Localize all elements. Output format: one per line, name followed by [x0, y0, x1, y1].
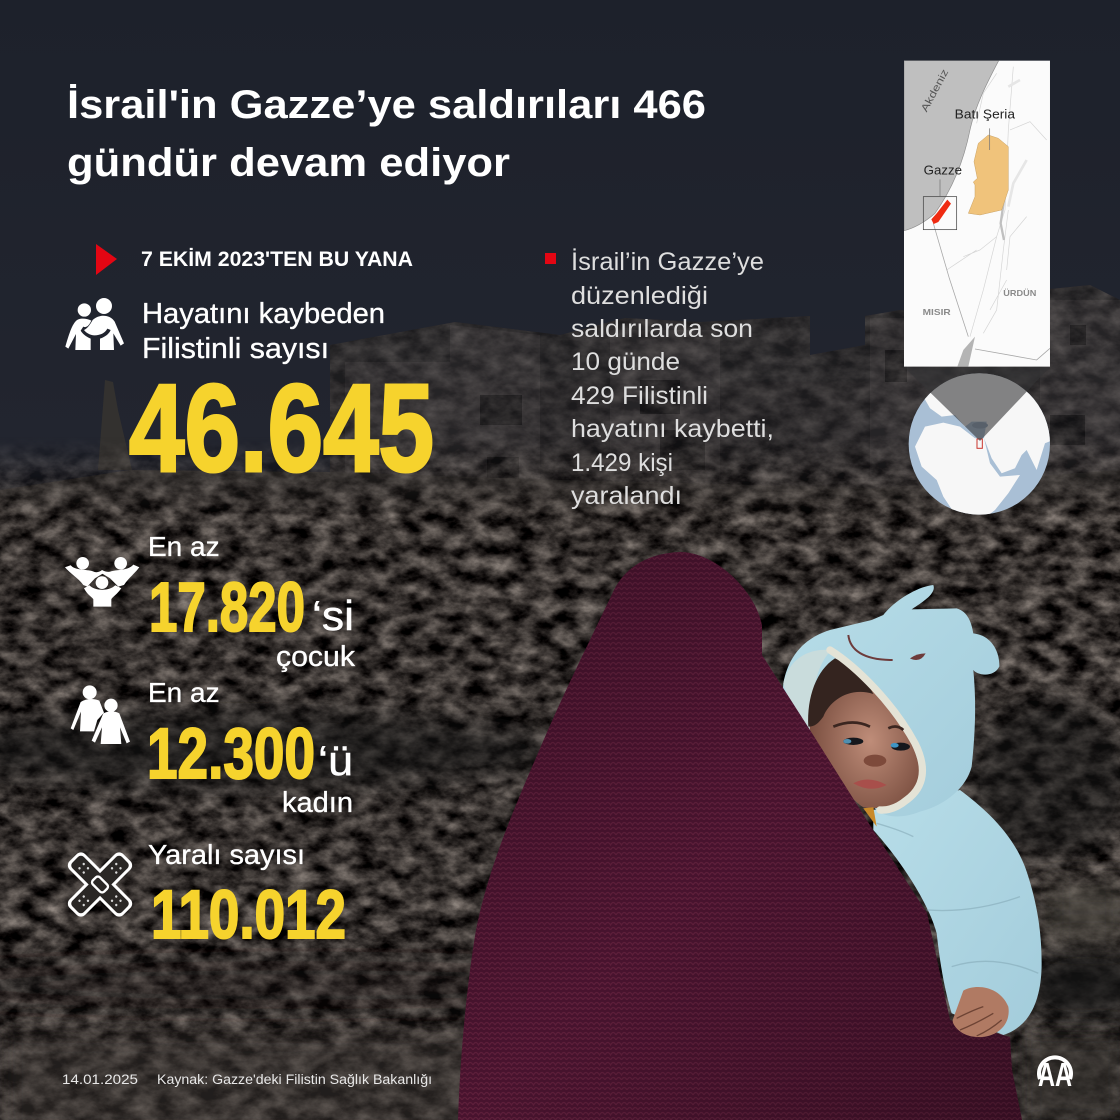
- photo: baby hand: [953, 987, 1009, 1037]
- stat: children: çocuk: [276, 641, 356, 673]
- callout text: İsrail’in Gazze’ye: [571, 247, 764, 276]
- label: deaths: [142, 298, 385, 365]
- callout text: [571, 247, 774, 510]
- locator map: [904, 61, 1050, 367]
- callout text: 429 Filistinli: [571, 382, 708, 410]
- label: deaths: Filistinli sayısı: [142, 333, 329, 365]
- callout text: hayatını kaybetti,: [571, 415, 774, 443]
- map labels: [920, 68, 1036, 317]
- footer: date: 14.01.2025: [62, 1072, 138, 1087]
- callout text: 1.429 kişi: [571, 449, 673, 477]
- map labels: Akdeniz: [920, 68, 951, 114]
- stat: children: 17.820: [149, 568, 305, 646]
- map terrain relief: [947, 67, 1047, 337]
- baby face: [809, 658, 920, 808]
- stat: injured: [148, 839, 346, 953]
- callout text: yaralandı: [571, 482, 682, 510]
- label: deaths: Hayatını kaybeden: [142, 298, 385, 330]
- map leader lines: [940, 128, 990, 197]
- stat: women: ‘ü: [318, 737, 353, 784]
- title: [67, 83, 706, 185]
- hood inner fur: [783, 650, 832, 730]
- Gaza locator box: [923, 197, 957, 230]
- map labels: Batı Şeria: [955, 106, 1016, 121]
- baby hood: [783, 585, 999, 816]
- stat: women: En az: [148, 677, 220, 708]
- background: rubble field: [0, 446, 1120, 1120]
- callout text: saldırılarda son: [571, 315, 753, 343]
- icon: women: [71, 685, 130, 744]
- map labels: Gazze: [924, 163, 962, 178]
- date marker: red triangle: [96, 244, 117, 275]
- callout text: düzenlediği: [571, 282, 708, 310]
- map zoom cone: [904, 367, 1050, 441]
- title: gündür devam ediyor: [67, 141, 510, 185]
- stat: injured: 110.012: [151, 876, 346, 953]
- footer: source: Kaynak: Gazze'deki Filistin Sağlık Bakanlığı: [157, 1072, 432, 1087]
- icon: children: [65, 557, 139, 607]
- date heading: 7 EKİM 2023'TEN BU YANA: [141, 248, 413, 271]
- callout text: 10 günde: [571, 348, 680, 376]
- stat: women: kadın: [282, 787, 353, 819]
- West Bank: [968, 135, 1008, 215]
- callout bullet: [545, 253, 556, 264]
- stat: injured: Yaralı sayısı: [148, 839, 305, 870]
- locator globe: [909, 367, 1053, 517]
- map land: [904, 61, 1050, 367]
- stat: women: 12.300: [147, 715, 315, 794]
- map labels: ÜRDÜN: [1003, 288, 1036, 298]
- logo: Anadolu Agency: AA: [1038, 1056, 1072, 1093]
- map borders: [933, 223, 1050, 360]
- stat: children: ‘si: [312, 592, 354, 639]
- icon: family: [65, 298, 124, 350]
- baby eyes and mouth: [833, 722, 910, 789]
- photo: woman in maroon veil: [458, 552, 1022, 1120]
- coat cuff folds: [877, 823, 1038, 973]
- photo: baby in blue hooded coat: [783, 585, 1042, 1035]
- baby hair: [808, 658, 873, 727]
- stat: children: [148, 531, 356, 673]
- baby coat body: [873, 790, 1042, 1035]
- stat: women: [147, 677, 353, 819]
- gulf of aqaba: [957, 337, 975, 367]
- Gaza strip: [931, 200, 951, 224]
- hood fur lining: [830, 650, 922, 810]
- background: ruined buildings: [13, 285, 1120, 488]
- number: total deaths: 46.645: [129, 360, 434, 498]
- title: İsrail'in Gazze’ye saldırıları 466: [67, 83, 706, 127]
- hood ear details: [848, 635, 893, 660]
- orange collar: [863, 807, 877, 827]
- map sea: [904, 61, 999, 231]
- icon: bandage: [46, 831, 154, 938]
- map labels: MISIR: [923, 307, 951, 317]
- stat: children: En az: [148, 531, 220, 562]
